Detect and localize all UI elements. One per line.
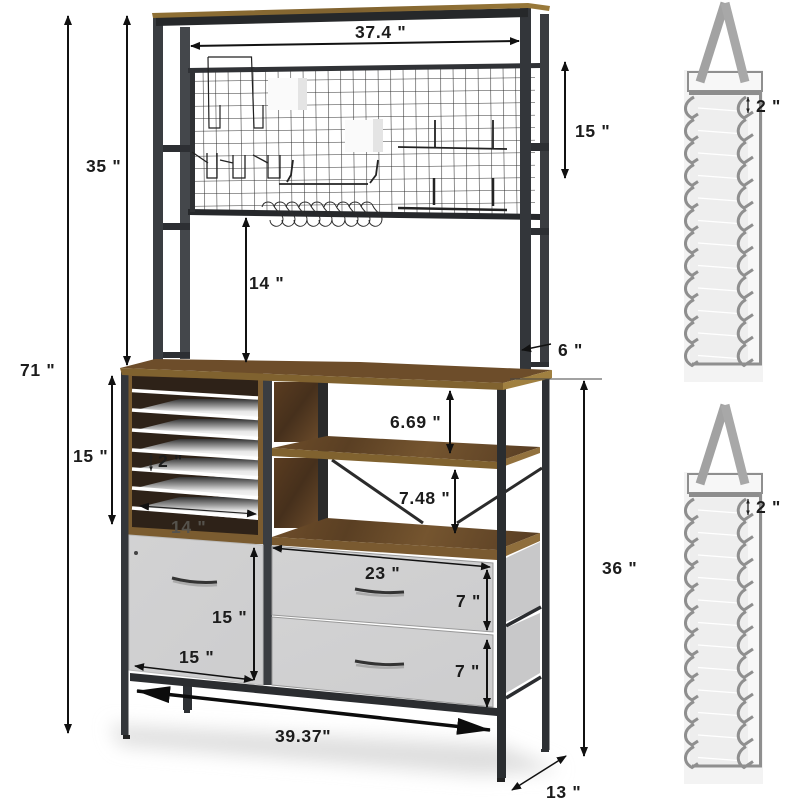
S hooks row <box>262 202 382 226</box>
bottom rail <box>130 673 497 716</box>
dimension: 13 inches <box>512 756 581 800</box>
mesh shelves <box>279 120 507 210</box>
fabric side panels <box>506 542 540 693</box>
organizer top <box>684 3 763 382</box>
dimension: 39.37 inches <box>137 691 490 746</box>
dimension: 23 inches: 23 " <box>365 563 400 583</box>
dimension: 15 inches drawer width: 15 " <box>179 647 214 667</box>
dimension: 15 inches drawer height <box>212 548 254 680</box>
dimension: 14 inches slot: 14 " <box>171 517 206 537</box>
rear x braces <box>332 460 542 523</box>
dimension: organizer 2 inches top: 2 " <box>756 96 781 116</box>
dimension: 7 inches upper <box>456 570 487 630</box>
dimension: 23 inches <box>273 548 490 583</box>
lower cabinet <box>120 359 552 782</box>
dimension: 15 inches cubby: 15 " <box>73 446 108 466</box>
cubby storage <box>128 372 263 544</box>
dimension: 7 inches lower: 7 " <box>455 661 480 681</box>
lower shelf <box>272 518 540 560</box>
dimension: 7 inches upper: 7 " <box>456 591 481 611</box>
dimension: 37.4 inches <box>191 22 519 46</box>
top board <box>152 3 550 18</box>
dimension: 15 inches panel: 15 " <box>575 121 610 141</box>
dimension: organizer 2 inches bottom: 2 " <box>756 497 781 517</box>
top rail <box>156 8 528 26</box>
hutch upper frame <box>152 3 550 378</box>
wire mesh panel <box>188 63 540 220</box>
front left post <box>153 17 163 360</box>
dimension: 35 inches: 35 " <box>86 156 121 176</box>
back right post <box>540 14 549 366</box>
organizer bottom <box>684 405 763 784</box>
dimension: 15 inches drawer height: 15 " <box>212 607 247 627</box>
worktop <box>120 359 552 390</box>
mesh basket hook <box>208 57 263 128</box>
white box two <box>345 119 383 152</box>
left drawer <box>129 535 263 685</box>
front right leg <box>497 384 506 782</box>
middle shelf <box>272 436 540 469</box>
dimension: 15 inches panel <box>565 62 610 178</box>
dimension: 2 inches slot: 2 " <box>158 451 183 471</box>
dimension: 39.37 inches: 39.37" <box>275 726 331 746</box>
front left leg <box>121 372 130 739</box>
dimension: 6 inches <box>522 340 583 360</box>
white box one <box>268 78 307 110</box>
back legs <box>183 376 550 752</box>
dimension: 71 inches height: 71 " <box>20 360 55 380</box>
paper shelves <box>132 390 258 520</box>
dimension: 37.4 inches: 37.4 " <box>355 22 406 42</box>
dimension: 14 inches slot <box>140 506 256 537</box>
dimension: 7 inches lower <box>455 640 487 707</box>
dimension: 6.69 inches <box>390 391 450 453</box>
front right post <box>520 8 531 378</box>
mesh small hooks <box>192 152 280 178</box>
wood back panel <box>274 382 328 532</box>
upper right drawer <box>272 546 493 632</box>
dimension: 6 inches: 6 " <box>558 340 583 360</box>
side rails <box>506 607 541 698</box>
dimension: 15 inches drawer width <box>135 647 253 680</box>
dimension: 6.69 inches: 6.69 " <box>390 412 441 432</box>
center post <box>263 380 272 685</box>
dimension: 14 inches gap: 14 " <box>249 273 284 293</box>
dimension: 36 inches: 36 " <box>602 558 637 578</box>
dimension: 7.48 inches: 7.48 " <box>399 488 450 508</box>
lower right drawer <box>272 617 493 707</box>
floor shadow <box>110 725 560 775</box>
dimension: 7.48 inches <box>399 470 455 533</box>
side rails <box>163 143 549 367</box>
back left post <box>180 27 190 359</box>
